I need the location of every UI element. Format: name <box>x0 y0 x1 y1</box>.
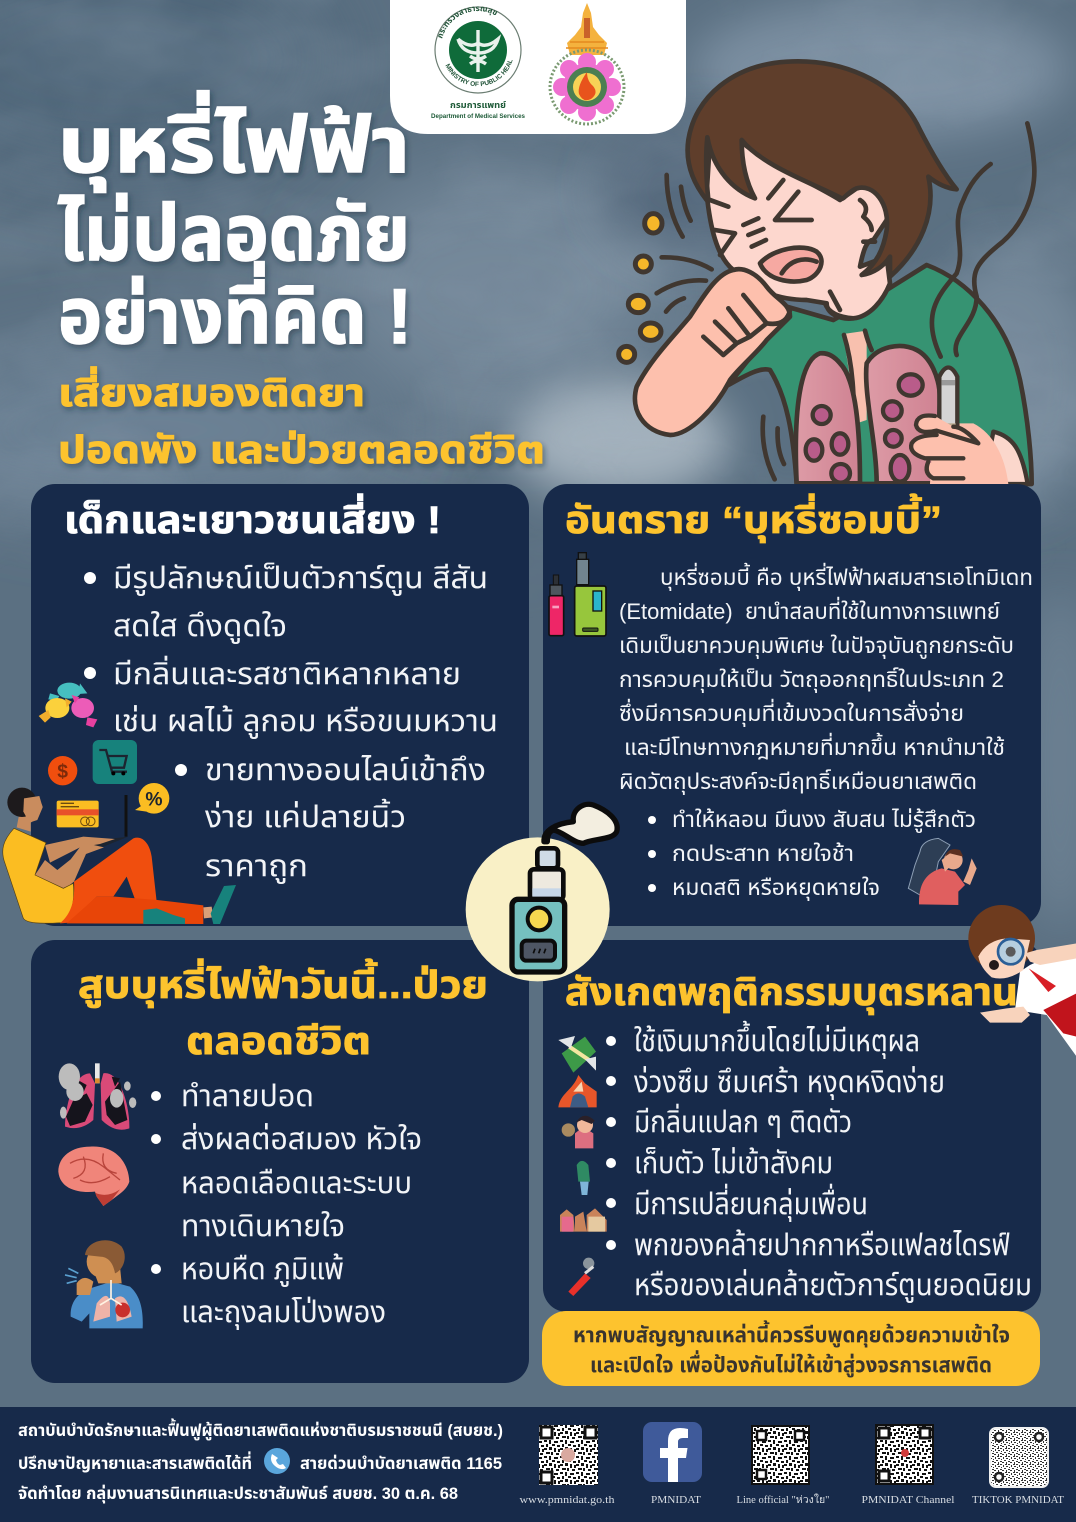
list: warning signs: เก็บตัว ไม่เข้าสังคม <box>634 1147 833 1180</box>
icon: vape kit <box>549 553 606 636</box>
text block: etomidate explanation <box>619 562 1033 795</box>
title: ไม่ปลอดภัย <box>58 189 410 277</box>
callout: talk with understanding: และเปิดใจ เพื่อป้องกันไม่ให้เข้าสู่วงจรการเสพติด <box>590 1350 992 1378</box>
list: health harms: และถุงลมโป่งพอง <box>181 1296 386 1330</box>
list: health harms: ทางเดินหายใจ <box>181 1210 345 1243</box>
icon: dizzy person <box>908 838 977 905</box>
icon: group of friends <box>560 1208 607 1232</box>
text block: institute and hotline: ปรึกษาปัญหายาและสารเสพติดได้ที่ <box>18 1451 252 1473</box>
background: smoke sky <box>0 0 1076 909</box>
panel: children and youth at risk <box>31 484 529 926</box>
panel: vaping today sick for life <box>31 940 529 1383</box>
icon: dollar coin <box>48 756 77 785</box>
logo: Ministry of Public Health: Department of Medical Services <box>431 113 525 120</box>
icon: person with asthma <box>65 1240 143 1328</box>
list: effects: กดประสาท หายใจช้า <box>672 841 854 866</box>
icon: candies <box>39 683 97 727</box>
list: health harms: หอบหืด ภูมิแพ้ <box>181 1253 344 1287</box>
icon: vape device in circle <box>466 804 617 981</box>
logo: Ministry of Public Health <box>431 6 525 120</box>
list: health harms: ส่งผลต่อสมอง หัวใจ <box>181 1123 422 1156</box>
list: warning signs: ง่วงซึม ซึมเศร้า หงุดหงิดง่าย <box>634 1066 945 1100</box>
text block: etomidate explanation: (Etomidate) ยานำสลบที่ใช้ในทางการแพทย์ <box>619 596 1000 624</box>
QR: youtube channel <box>862 1425 955 1506</box>
logo panel <box>390 0 686 134</box>
illustration: online shopping teen <box>3 740 236 924</box>
icon: percent bubble: % <box>145 789 163 810</box>
list: warning signs: พกของคล้ายปากกาหรือแฟลชไดรฟ์ <box>634 1229 1010 1262</box>
list: warning signs: มีกลิ่นแปลก ๆ ติดตัว <box>634 1103 852 1139</box>
subtitle: ปอดพัง และป่วยตลอดชีวิต <box>58 430 545 472</box>
list: why children are attracted: ราคาถูก <box>205 850 308 884</box>
heading: sick for life: ตลอดชีวิต <box>186 1021 371 1063</box>
text block: etomidate explanation: บุหรี่ซอมบี้ คือ บุหรี่ไฟฟ้าผสมสารเอโทมิเดท <box>660 562 1033 591</box>
subtitle: เสี่ยงสมองติดยา <box>58 366 365 415</box>
panel: observe your child's behavior <box>543 940 1041 1312</box>
illustration: coughing child with damaged lungs <box>619 61 1034 484</box>
panel: zombie cigarette danger <box>543 484 1041 926</box>
footer bar <box>0 1407 1076 1522</box>
callout: talk with understanding <box>542 1311 1040 1386</box>
list: why children are attracted: ง่าย แค่ปลายนิ้ว <box>205 798 406 834</box>
QR: line official <box>736 1426 830 1506</box>
heading: zombie vape: อันตราย “บุหรี่ซอมบี้” <box>565 493 942 543</box>
title: อย่างที่คิด ! <box>58 262 412 360</box>
heading: sick for life <box>78 958 488 1063</box>
icon: damaged lungs <box>59 1063 136 1130</box>
text block: etomidate explanation: การควบคุมให้เป็น วัตถุออกฤทธิ์ในประเภท 2 <box>619 666 1004 693</box>
text block: institute and hotline: สถาบันบำบัดรักษาและฟื้นฟูผู้ติดยาเสพติดแห่งชาติบรมราชชนนี (สบยช.) <box>18 1418 503 1441</box>
logo: PMNIDAT <box>550 3 624 124</box>
icon: angry person with flames <box>558 1075 597 1107</box>
icon: disguised vape pen <box>568 1258 594 1296</box>
text block: institute and hotline: สายด่วนบำบัดยาเสพติด 1165 <box>300 1453 502 1473</box>
icon: bad smell person <box>562 1116 595 1148</box>
text block: etomidate explanation: เดิมเป็นยาควบคุมพิเศษ ในปัจจุบันถูกยกระดับ <box>619 633 1014 659</box>
icon: facebook: PMNIDAT <box>651 1495 702 1506</box>
illustration: boy with magnifier <box>968 905 1076 1057</box>
list: why children are attracted: ขายทางออนไลน์เข้าถึง <box>205 754 486 787</box>
list: why children are attracted <box>84 562 498 884</box>
text block: etomidate explanation: และมีโทษทางกฎหมายที่มากขึ้น หากนำมาใช้ <box>624 732 1005 760</box>
text block: etomidate explanation: ผิดวัตถุประสงค์จะมีฤทธิ์เหมือนยาเสพติด <box>619 768 977 795</box>
list: effects: หมดสติ หรือหยุดหายใจ <box>672 875 880 901</box>
list: health harms: หลอดเลือดและระบบ <box>181 1167 412 1200</box>
list: why children are attracted: มีกลิ่นและรสชาติหลากหลาย <box>113 655 461 691</box>
QR: youtube channel: PMNIDAT Channel <box>862 1495 955 1506</box>
text block: institute and hotline: จัดทำโดย กลุ่มงานสารนิเทศและประชาสัมพันธ์ สบยช. 30 ต.ค. 68 <box>18 1483 458 1504</box>
icons: warning sign pictograms <box>558 1036 607 1296</box>
list: warning signs: ใช้เงินมากขึ้นโดยไม่มีเหตุผล <box>634 1020 920 1059</box>
logo: Ministry of Public Health: กระทรวงสาธารณสุข <box>438 6 498 38</box>
icon: percent bubble <box>135 783 169 814</box>
list: effects <box>648 807 976 901</box>
icon: credit card <box>57 801 99 827</box>
list: why children are attracted: มีรูปลักษณ์เป็นตัวการ์ตูน สีสัน <box>113 562 488 596</box>
list: effects: ทำให้หลอน มึนงง สับสน ไม่รู้สึกตัว <box>672 807 976 833</box>
text block: institute and hotline <box>18 1418 503 1504</box>
icon: facebook <box>643 1422 702 1506</box>
icon: dollar coin: $ <box>57 761 68 782</box>
QR: tiktok: TIKTOK PMNIDAT <box>972 1495 1065 1506</box>
list: warning signs: มีการเปลี่ยนกลุ่มเพื่อน <box>634 1183 868 1222</box>
QR: website: www.pmnidat.go.th <box>520 1495 615 1506</box>
heading: sick for life: สูบบุหรี่ไฟฟ้าวันนี้...ป่วย <box>78 958 488 1008</box>
heading: children at risk: เด็กและเยาวชนเสี่ยง ! <box>64 493 441 542</box>
icon: shopping cart <box>93 740 137 784</box>
icon: phone <box>264 1448 290 1474</box>
subtitle <box>58 366 545 472</box>
list: warning signs <box>606 1020 1032 1303</box>
list: why children are attracted: เช่น ผลไม้ ลูกอม หรือขนมหวาน <box>113 705 498 739</box>
list: warning signs: หรือของเล่นคล้ายตัวการ์ตูนยอดนิยม <box>634 1269 1032 1303</box>
text block: etomidate explanation: ซึ่งมีการควบคุมที่เข้มงวดในการสั่งจ่าย <box>619 698 964 727</box>
icon: brain <box>58 1147 129 1206</box>
icon: withdrawn hooded teen <box>577 1161 590 1195</box>
callout: talk with understanding: หากพบสัญญาณเหล่านี้ควรรีบพูดคุยด้วยความเข้าใจ <box>573 1320 1010 1348</box>
logo: Ministry of Public Health: กรมการแพทย์ <box>450 100 506 110</box>
QR: website <box>520 1425 615 1506</box>
heading: observe behavior: สังเกตพฤติกรรมบุตรหลาน <box>565 972 1018 1015</box>
title: บุหรี่ไฟฟ้า <box>58 91 410 192</box>
title <box>58 91 412 360</box>
list: why children are attracted: สดใส ดึงดูดใจ <box>113 610 287 644</box>
QR: line official: Line official "ห่วงใย" <box>736 1493 830 1506</box>
list: health harms: ทำลายปอด <box>181 1080 314 1113</box>
icon: flying money <box>558 1036 596 1073</box>
QR: tiktok <box>972 1428 1065 1506</box>
list: health harms <box>151 1080 422 1330</box>
